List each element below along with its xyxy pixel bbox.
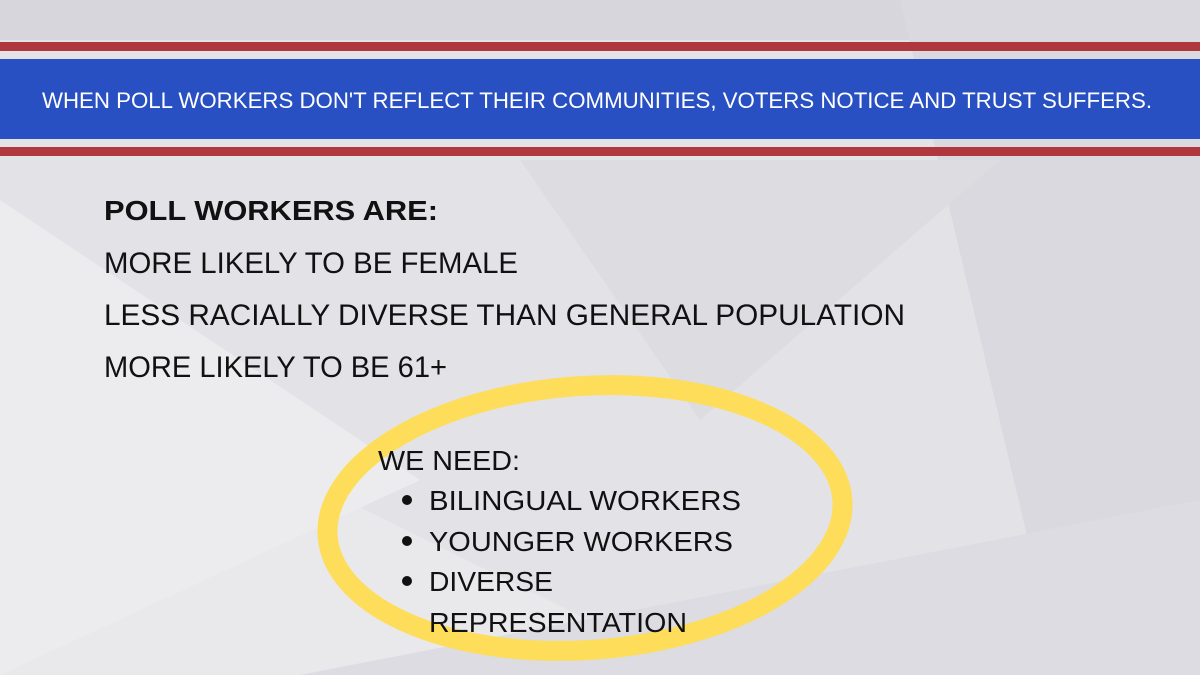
we need block: REPRESENTATION [429,607,687,638]
highlight circle [318,368,852,668]
heading: poll workers are: POLL WORKERS ARE: [104,195,438,226]
we need block: WE NEED: [378,445,520,476]
we need block: DIVERSE [429,566,553,597]
list: poll worker facts: MORE LIKELY TO BE 61+ [104,351,447,384]
bottom red stripe [0,147,1200,156]
banner: WHEN POLL WORKERS DON'T REFLECT THEIR COMMUNITIES, VOTERS NOTICE AND TRUST SUFFERS. [42,88,1152,113]
we need block: BILINGUAL WORKERS [429,485,741,516]
we need block: YOUNGER WORKERS [429,526,733,557]
we need block [378,445,741,638]
banner [0,59,1200,139]
list: poll worker facts: MORE LIKELY TO BE FEMALE [104,247,518,280]
top red stripe [0,42,1200,51]
list: poll worker facts [104,247,905,384]
list: poll worker facts: LESS RACIALLY DIVERSE THAN GENERAL POPULATION [104,299,905,332]
